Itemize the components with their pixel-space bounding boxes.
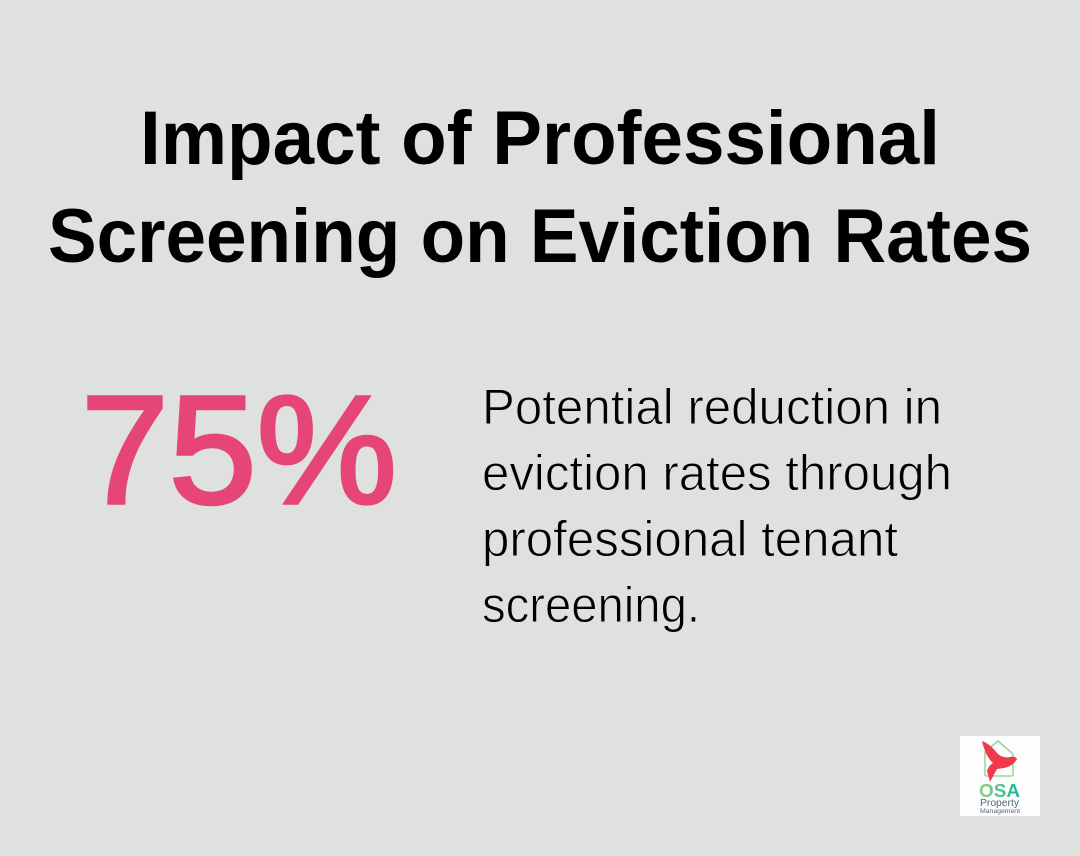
- title: Screening on Eviction Rates: [48, 194, 1032, 279]
- description text: professional tenant: [482, 511, 898, 567]
- icon: red bird: [982, 741, 1017, 782]
- logo: OSA Property Management: [960, 736, 1040, 816]
- logo: OSA Property Management: Management: [980, 809, 1020, 815]
- icon: house outline: [985, 741, 1013, 776]
- description text: screening.: [482, 577, 700, 633]
- description text: [482, 379, 952, 633]
- title: [48, 96, 1032, 279]
- description text: eviction rates through: [482, 445, 952, 501]
- title: Impact of Professional: [140, 96, 940, 181]
- logo wordmark: OSA: [979, 781, 1020, 801]
- description text: Potential reduction in: [482, 379, 942, 435]
- logo: OSA Property Management: Property: [980, 798, 1019, 809]
- big statistic: 75%: 75%: [81, 364, 397, 536]
